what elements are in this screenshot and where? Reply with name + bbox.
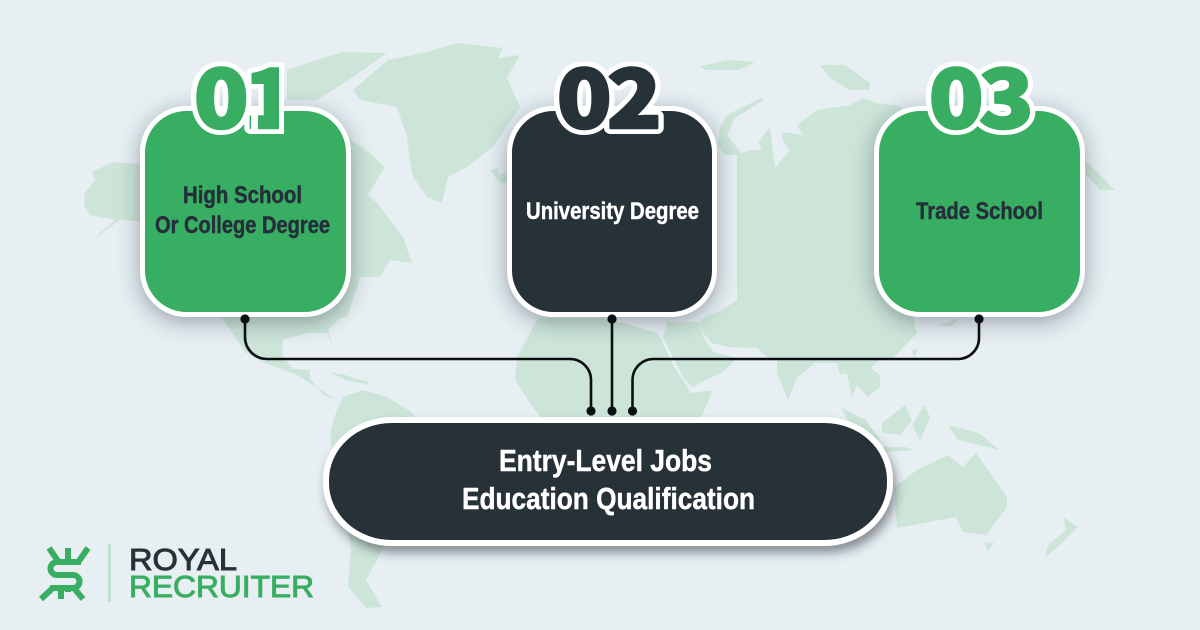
number 01 <box>191 62 284 135</box>
number 03: 03 <box>929 36 1034 152</box>
number 01: 01 <box>194 36 299 152</box>
world map <box>84 43 1115 608</box>
number 03: 03 <box>929 36 1034 152</box>
logo wordmark: ROYAL <box>129 542 237 577</box>
pill text: Entry-Level Jobs <box>499 443 712 478</box>
result pill <box>326 420 890 543</box>
logo <box>41 542 314 604</box>
icon: royal recruiter emblem <box>41 548 88 599</box>
pill text: Education Qualification <box>462 481 755 516</box>
number 02: 02 <box>557 36 662 152</box>
card text: high school or college degree: High School <box>183 182 302 209</box>
card 03 <box>876 36 1082 315</box>
logo divider <box>108 544 111 602</box>
connector lines <box>240 314 984 416</box>
card 01 <box>142 36 348 315</box>
card text: trade school: Trade School <box>916 198 1043 225</box>
number 02: 02 <box>557 36 662 152</box>
card text: university degree: University Degree <box>526 198 699 225</box>
logo wordmark: RECRUITER <box>129 569 314 604</box>
number 01: 01 <box>194 36 299 152</box>
card 02 <box>510 36 714 315</box>
card text: high school or college degree: Or College Degree <box>155 212 330 239</box>
